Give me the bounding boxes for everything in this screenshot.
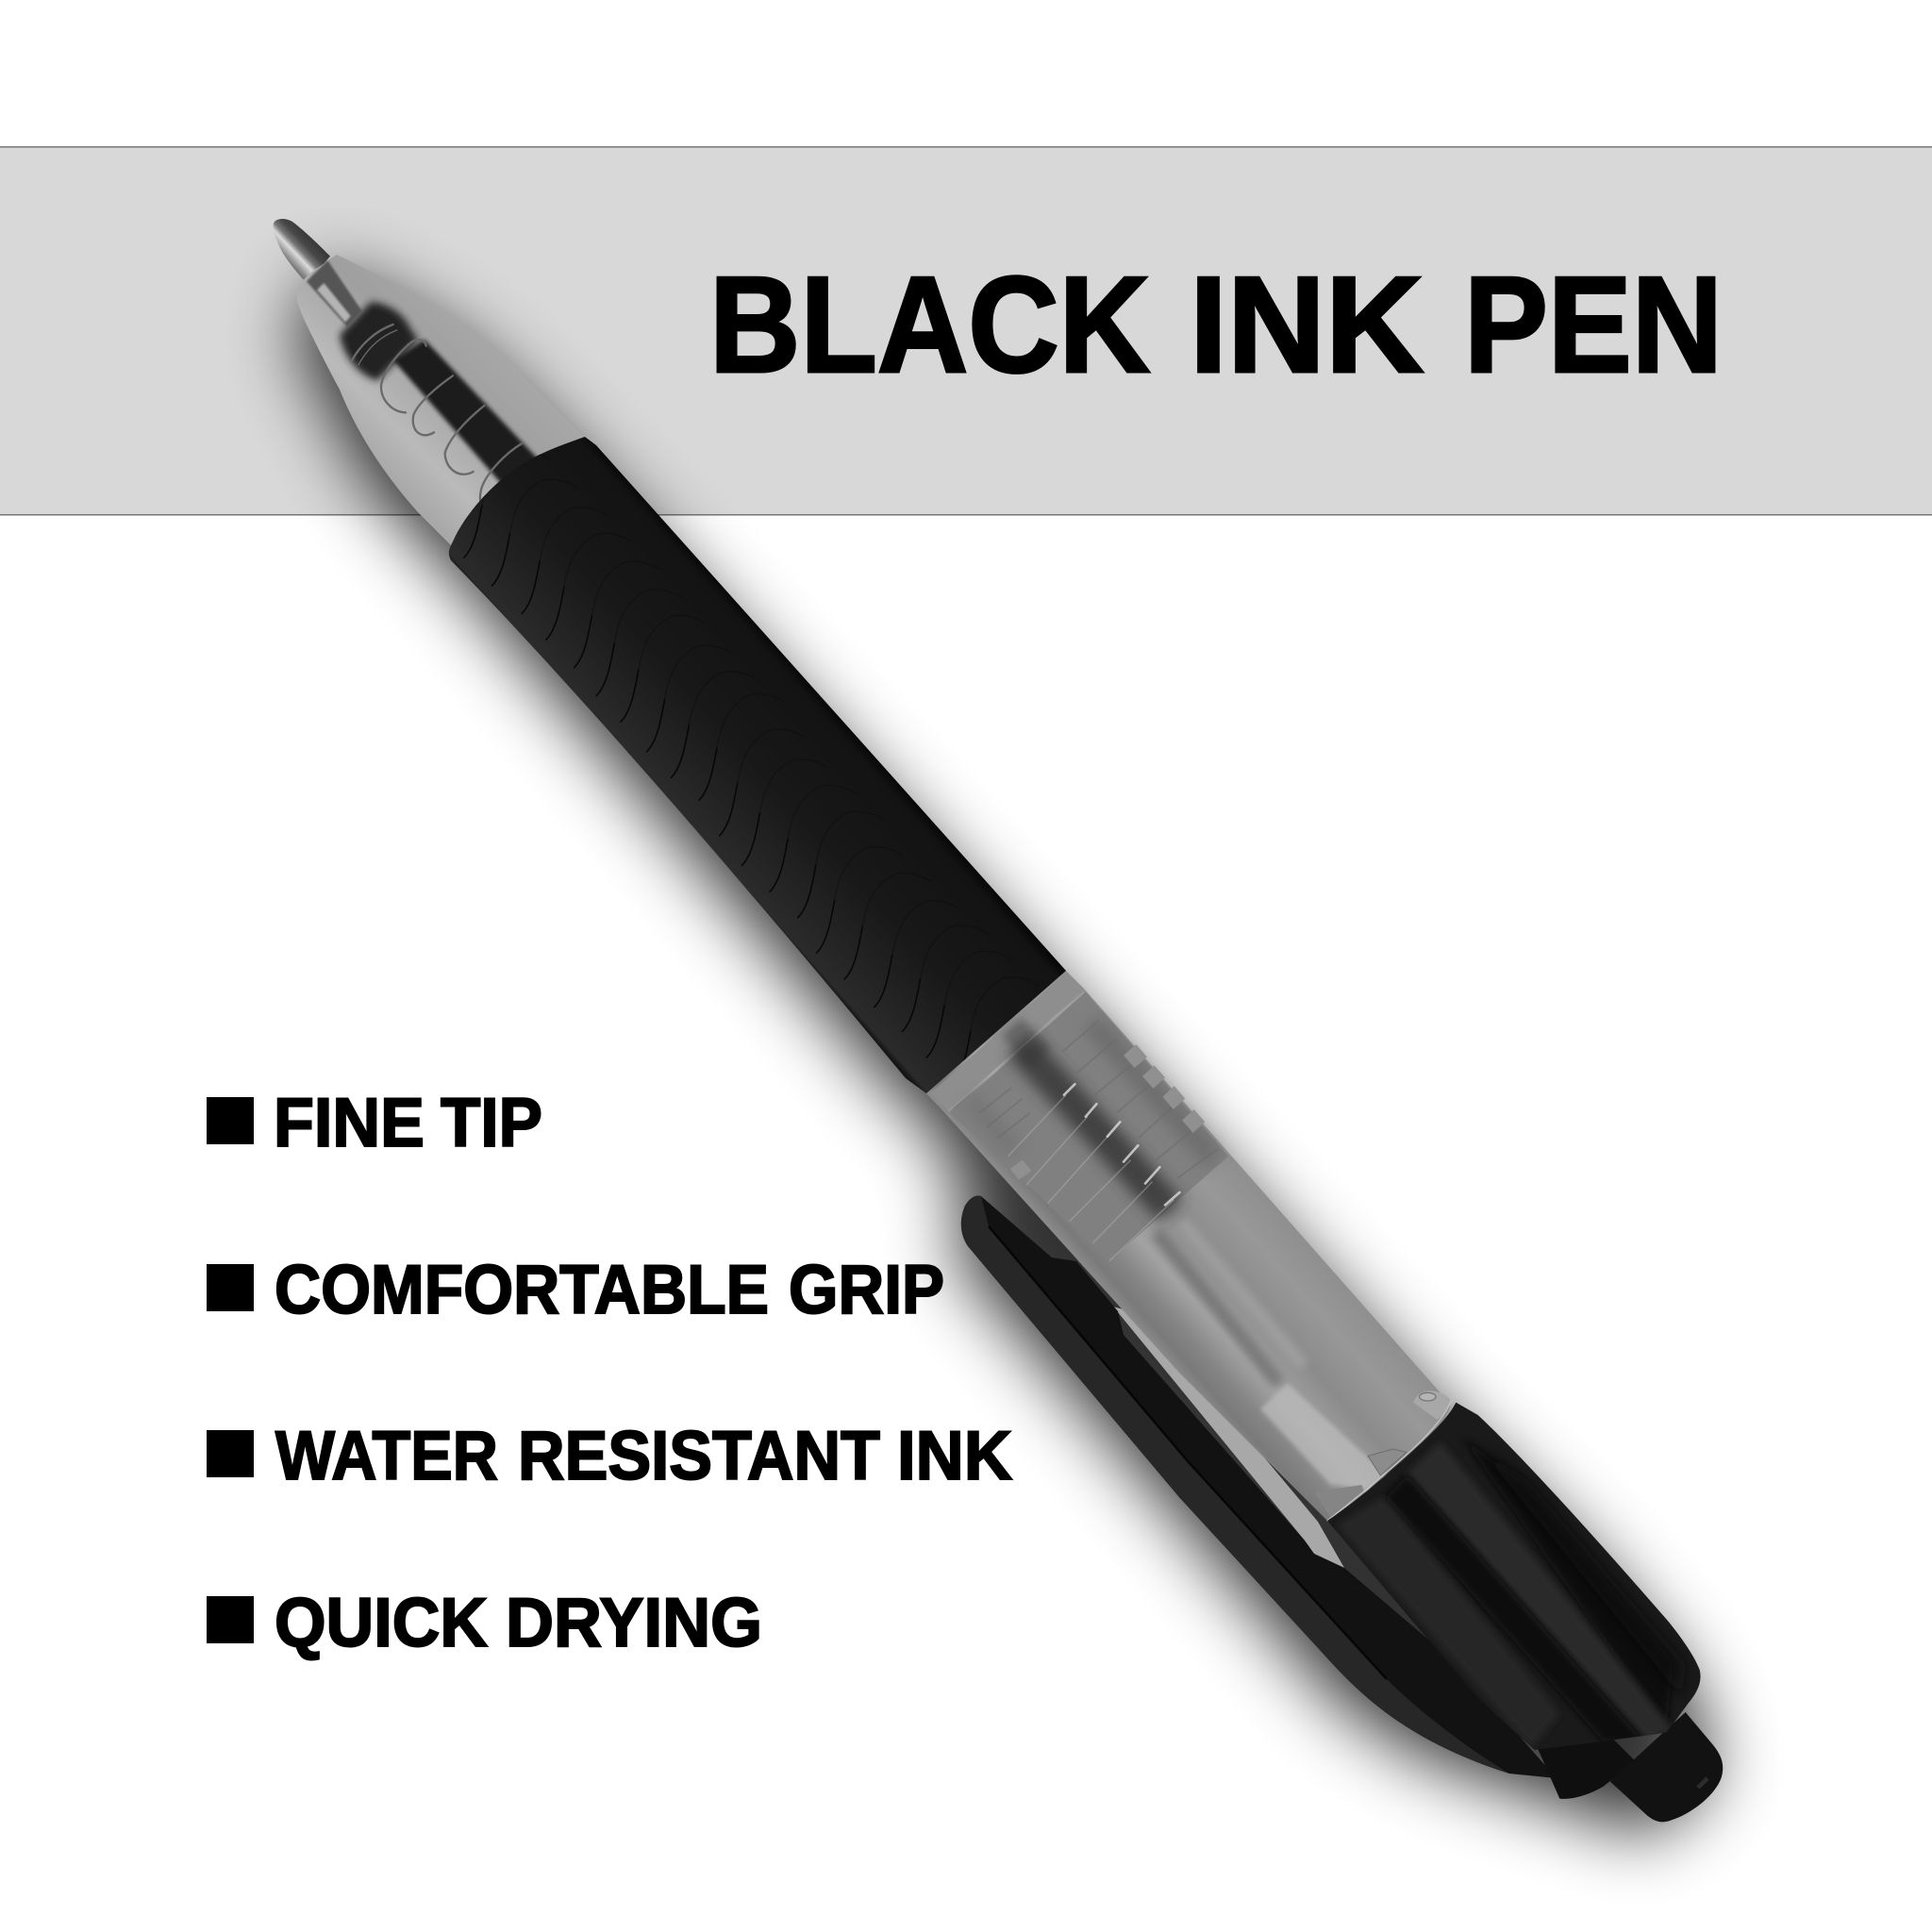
feature: water resistant ink: WATER xyxy=(275,1418,498,1494)
push button xyxy=(1538,1712,1723,1822)
feature: quick drying xyxy=(207,1585,762,1661)
feature list xyxy=(207,1085,1012,1661)
black end cap xyxy=(1327,1403,1701,1750)
feature: water resistant ink: INK xyxy=(897,1418,1012,1494)
feature: fine tip: TIP xyxy=(441,1085,542,1161)
cap facet shading xyxy=(1337,1437,1686,1748)
feature: water resistant ink xyxy=(207,1418,1012,1494)
feature: comfortable grip: GRIP xyxy=(789,1252,944,1328)
pen illustration xyxy=(274,219,1723,1836)
pocket clip xyxy=(961,1195,1557,1778)
light gap behind clip xyxy=(1113,1307,1344,1568)
title: INK xyxy=(1190,248,1424,401)
barrel details: inner end pieces xyxy=(1260,1384,1452,1521)
header band xyxy=(0,146,1932,515)
feature: quick drying: QUICK xyxy=(275,1585,488,1661)
feature: water resistant ink: RESISTANT xyxy=(518,1418,880,1494)
title: BLACK xyxy=(709,248,1150,401)
title: PEN xyxy=(1464,248,1723,401)
feature: quick drying: DRYING xyxy=(506,1585,762,1661)
feature: fine tip xyxy=(207,1085,542,1161)
clear barrel xyxy=(926,971,1452,1521)
grip wave grooves xyxy=(463,455,972,1060)
barrel details: ribbed section xyxy=(930,973,1304,1384)
clear nose cone xyxy=(297,255,583,547)
feature: comfortable grip: COMFORTABLE xyxy=(275,1252,769,1328)
nose internals: refill and spring xyxy=(307,260,547,505)
feature: fine tip: FINE xyxy=(274,1085,425,1161)
metal ballpoint tip xyxy=(274,219,330,280)
pen shadow xyxy=(295,270,1714,1836)
rubber grip xyxy=(449,437,1066,1093)
